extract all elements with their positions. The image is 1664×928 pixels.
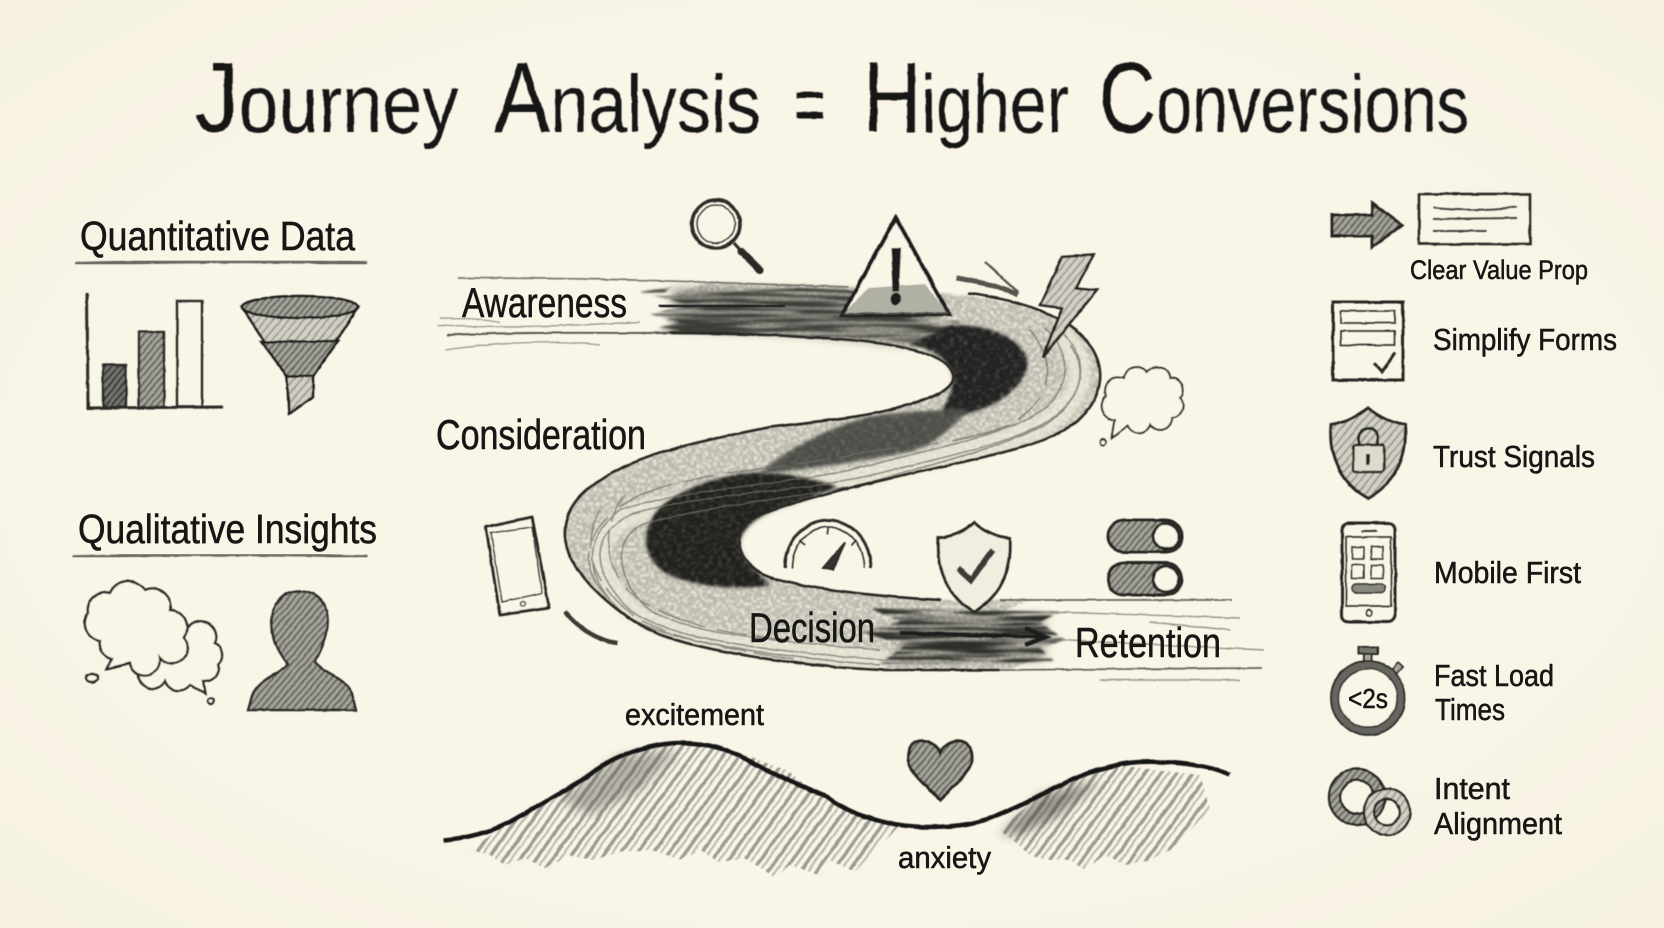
arrow: awareness direction [659, 305, 785, 307]
heading: qualitative insights: Qualitative Insights [78, 506, 377, 552]
title: = [794, 59, 826, 150]
tip: fast load times: <2s [1348, 683, 1388, 714]
road light outer band [600, 330, 1080, 660]
road shading: dark bends [640, 287, 1065, 664]
road strands [589, 328, 1081, 665]
chart: emotion curve [443, 697, 1230, 878]
curve hatching [470, 743, 900, 878]
curve line [443, 743, 1230, 840]
icon: toggles [1108, 520, 1182, 595]
icon: phone [486, 517, 549, 615]
tip: mobile first [1342, 523, 1581, 622]
tip: fast load times: Times [1435, 692, 1505, 727]
chart: journey road [436, 262, 1264, 680]
panel: qualitative insights [73, 506, 377, 710]
icon: speech clouds [85, 581, 222, 704]
tip: simplify forms [1333, 302, 1617, 380]
label: consideration: Consideration [436, 411, 646, 458]
panel: quantitative data [75, 213, 367, 414]
icon: lightning bolt [1040, 255, 1097, 357]
tip: intent alignment: Alignment [1434, 806, 1562, 841]
icon: heart [908, 741, 972, 800]
arrow: decision to retention [900, 628, 1046, 645]
road edges [437, 262, 1264, 680]
title: Analysis [494, 42, 761, 154]
title: Journey [195, 42, 458, 154]
tip: intent alignment [1329, 769, 1562, 841]
tip: intent alignment: Intent [1434, 771, 1510, 806]
title: Higher [863, 42, 1069, 154]
icon: magnifier [692, 200, 760, 270]
label: decision: Decision [749, 604, 875, 651]
tip: simplify forms: Simplify Forms [1433, 322, 1617, 357]
label: awareness: Awareness [462, 279, 627, 326]
heading: quantitative data: Quantitative Data [80, 213, 355, 259]
tip: trust signals [1331, 408, 1595, 498]
icon: bar chart [87, 293, 223, 408]
label: retention: Retention [1075, 619, 1221, 666]
icon: thought cloud [1100, 367, 1183, 445]
tip: mobile first: Mobile First [1434, 555, 1581, 590]
icon: speed gauge [785, 520, 871, 570]
tip: trust signals: Trust Signals [1433, 439, 1595, 474]
title [195, 42, 1469, 154]
title: Conversions [1099, 42, 1469, 154]
icon: warning triangle [842, 218, 949, 315]
tip: clear value prop: Clear Value Prop [1410, 255, 1588, 285]
tip: fast load times: Fast Load [1434, 658, 1554, 693]
icon: funnel [242, 296, 358, 414]
label: excitement: excitement [625, 697, 764, 732]
icon: person silhouette [248, 591, 356, 710]
icon: shield check [938, 523, 1010, 612]
tip: clear value prop [1332, 194, 1588, 285]
tip: fast load times [1331, 647, 1554, 735]
panel: conversion tips [1329, 194, 1617, 841]
label: anxiety: anxiety [898, 840, 991, 875]
road body [565, 283, 1100, 670]
